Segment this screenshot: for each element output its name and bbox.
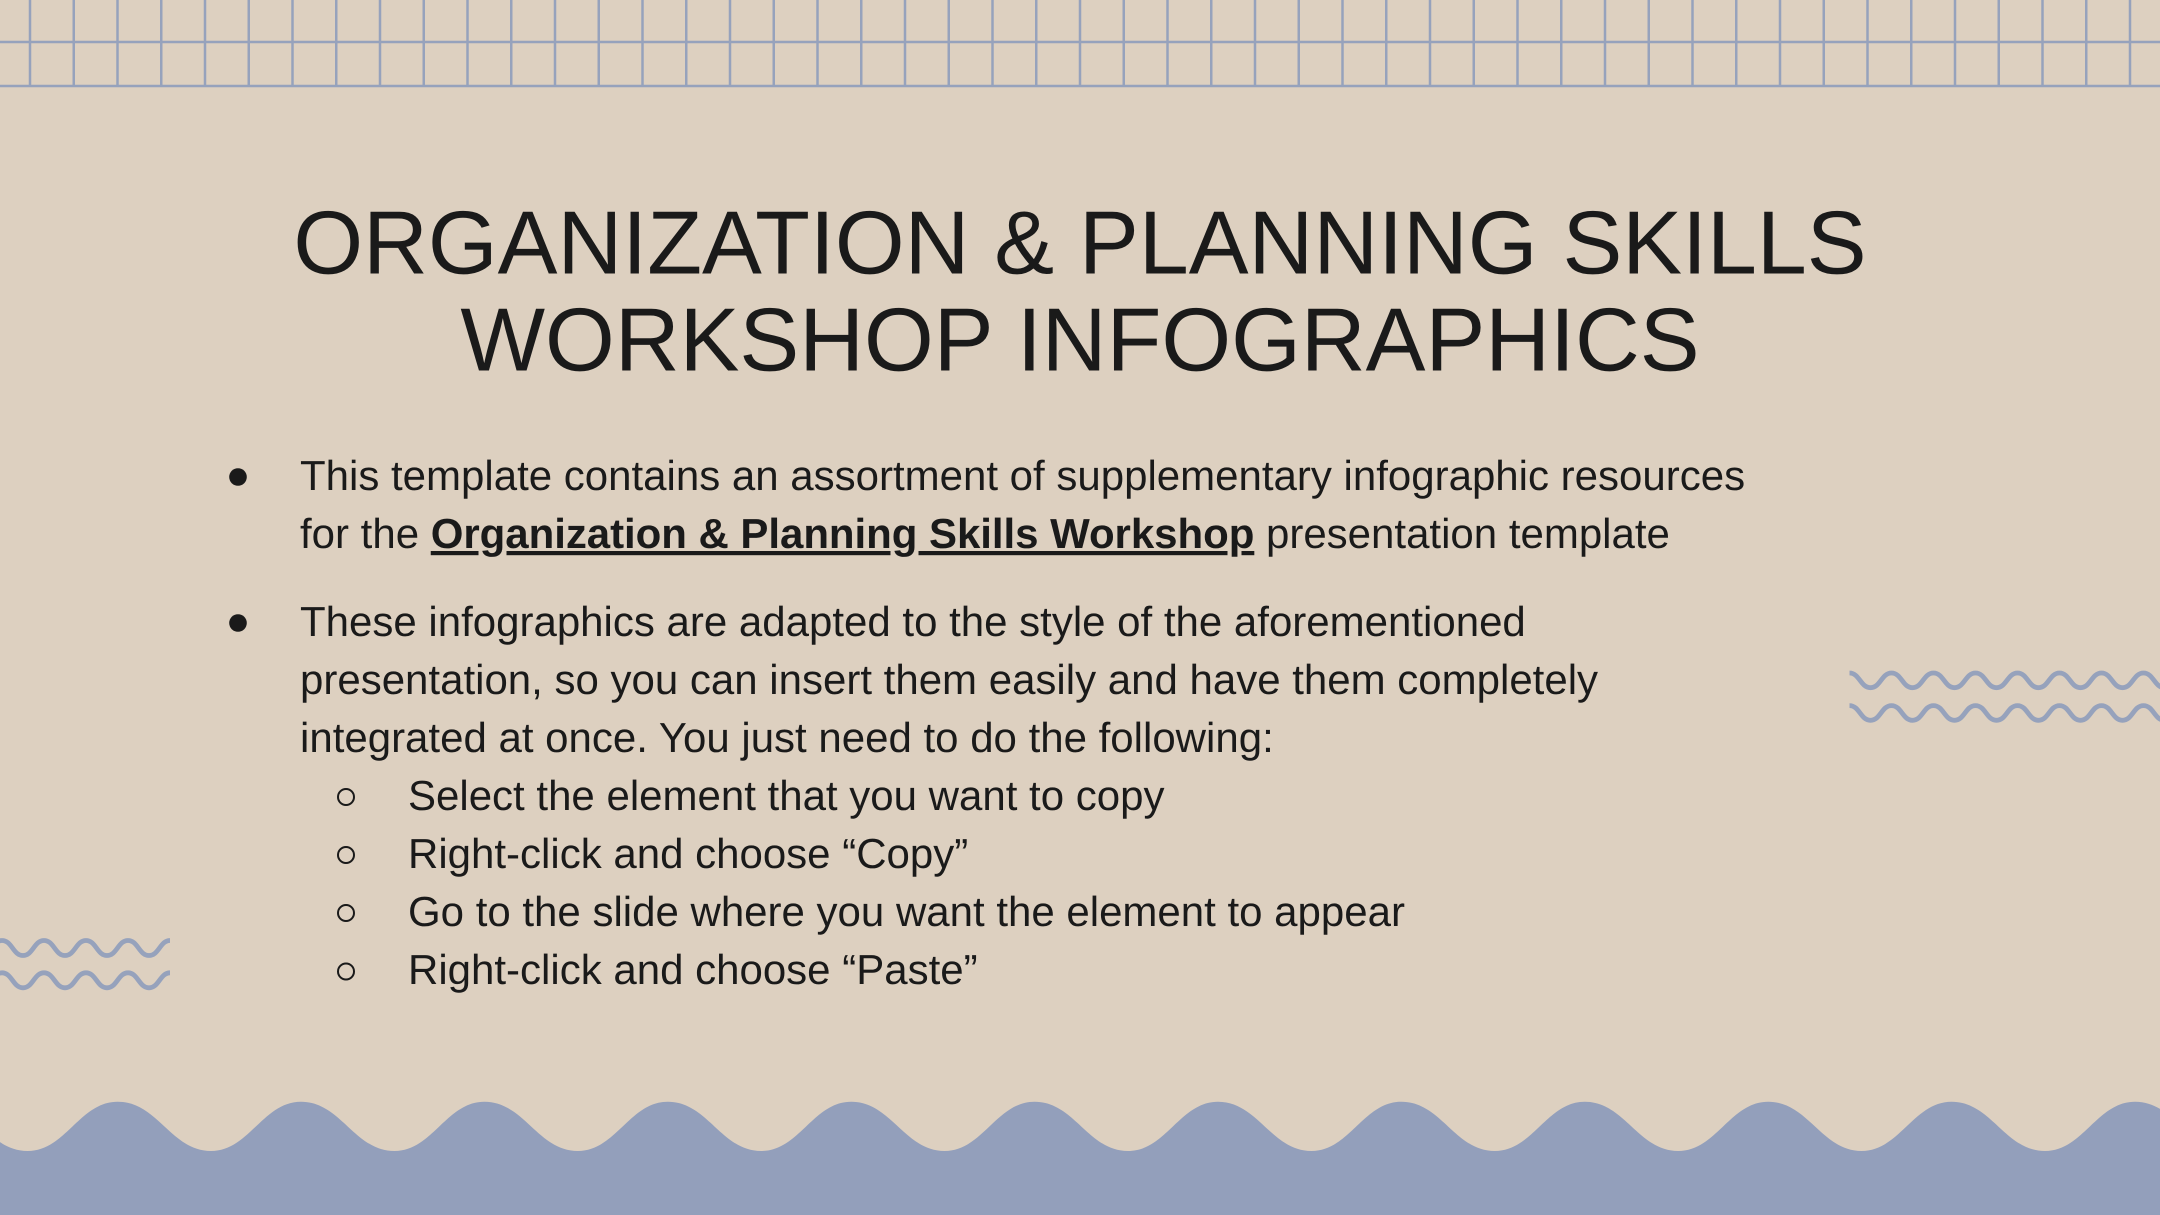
title: ORGANIZATION & PLANNING SKILLS	[293, 194, 1867, 294]
sub-bullet list: steps: Select the element that you want to copy	[408, 772, 1164, 819]
sub-bullet list: steps	[338, 772, 1405, 993]
bullet: how to use the infographics: integrated at once. You just need to do the following:	[300, 714, 1274, 761]
decorative squiggles: right side	[1850, 673, 2160, 720]
bullet: how to use the infographics: presentation, so you can insert them easily and have them completely	[300, 656, 1598, 703]
bullet: how to use the infographics	[229, 598, 1598, 761]
bullet: template description: This template contains an assortment of supplementary infographic resources	[300, 452, 1745, 499]
bottom wave band	[0, 1102, 2160, 1215]
sub-bullet list: steps: Go to the slide where you want the element to appear	[408, 888, 1405, 935]
bullet: template description: for the Organization & Planning Skills Workshop presentation template	[300, 510, 1670, 557]
title	[293, 194, 1867, 390]
bullet: how to use the infographics: These infographics are adapted to the style of the aforementioned	[300, 598, 1526, 645]
sub-bullet list: steps: Right-click and choose “Paste”	[408, 946, 978, 993]
sub-bullet list: steps: Right-click and choose “Copy”	[408, 830, 968, 877]
bullet: template description	[229, 452, 1745, 557]
title: WORKSHOP INFOGRAPHICS	[460, 290, 1700, 390]
decorative squiggles: left side	[0, 940, 170, 988]
